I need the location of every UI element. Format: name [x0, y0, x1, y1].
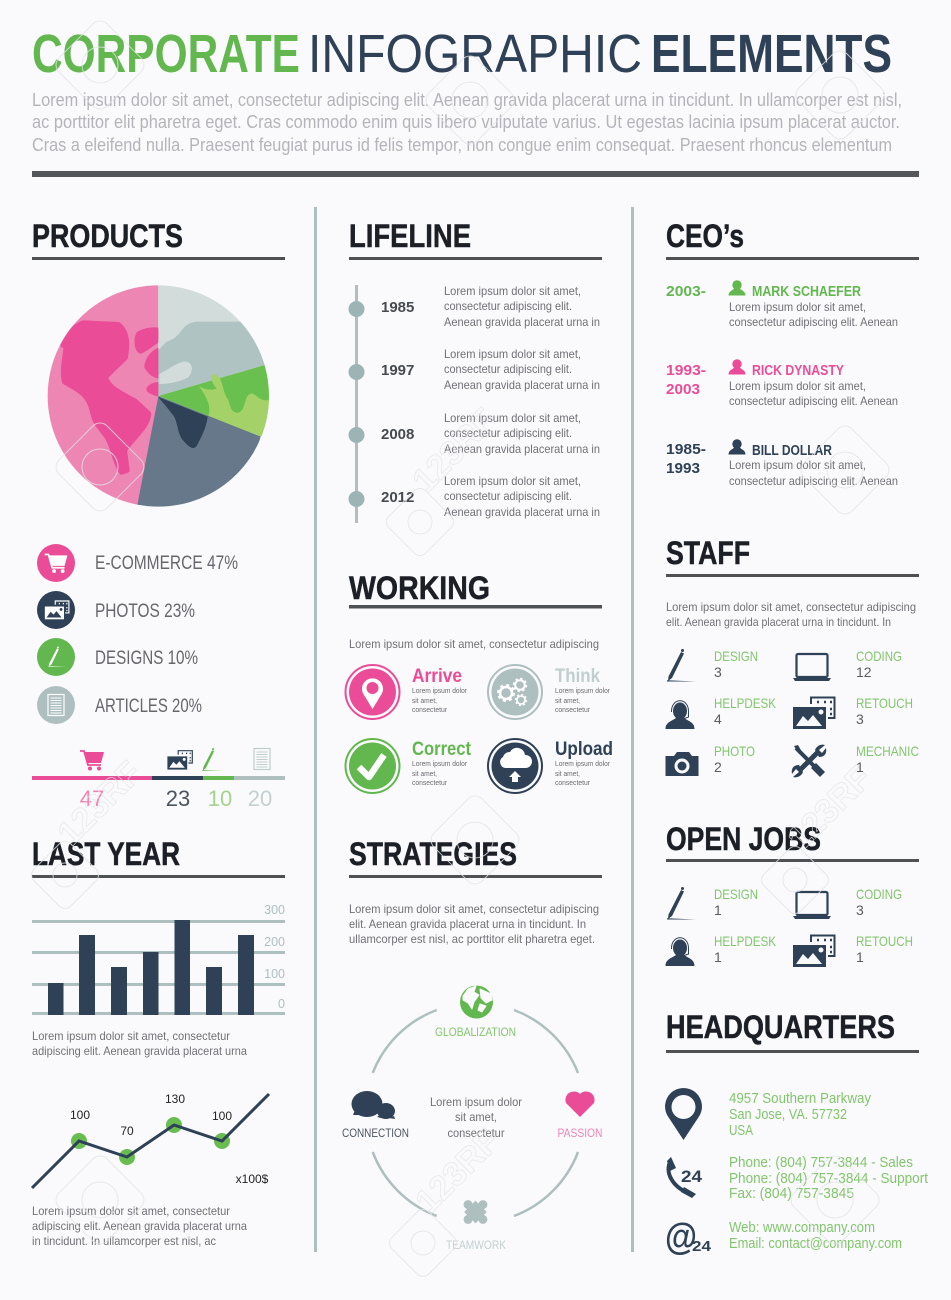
job: design: DESIGN	[714, 886, 758, 902]
entry 2008: 2008	[381, 426, 414, 443]
job: design	[667, 886, 758, 920]
bar chart: 300	[264, 903, 285, 917]
title	[32, 24, 892, 84]
job: helpdesk: 1	[714, 949, 722, 965]
ceo: rick dynasty: RICK DYNASTY	[752, 363, 844, 379]
entry 1997: consectetur adipiscing elit.	[444, 362, 572, 376]
ceo: rick dynasty	[666, 359, 898, 408]
share bar: 20	[248, 786, 272, 811]
step: arrive: Lorem ipsum dolor	[412, 686, 467, 695]
address: San Jose, VA. 57732	[729, 1107, 847, 1123]
address	[665, 1088, 872, 1140]
phone: 24	[681, 1167, 703, 1186]
ceo: rick dynasty: Lorem ipsum dolor sit amet,	[729, 379, 866, 393]
phone: Fax: (804) 757-3845	[729, 1186, 854, 1202]
entry 2008	[381, 411, 600, 456]
job: retouch	[793, 933, 913, 967]
web and email: @	[665, 1216, 697, 1257]
staff: helpdesk	[666, 695, 777, 729]
cycle centre text: sit amet,	[455, 1110, 497, 1124]
step: think: sit amet,	[555, 696, 580, 705]
step: arrive: sit amet,	[412, 696, 437, 705]
panel: last year	[32, 836, 285, 1248]
entry 1997: Aenean gravida placerat urna in	[444, 378, 600, 392]
ceo: bill dollar: BILL DOLLAR	[752, 443, 832, 459]
icon: connection	[342, 1091, 409, 1140]
staff: helpdesk: HELPDESK	[714, 695, 777, 711]
entry 2012	[381, 474, 600, 519]
heading: lifeline: LIFELINE	[349, 218, 471, 254]
entry 1997	[381, 347, 600, 392]
strategies text	[349, 902, 599, 946]
staff: coding	[793, 648, 902, 681]
step: arrive	[346, 665, 467, 719]
heading: lifeline	[349, 218, 602, 260]
ceo: bill dollar: Lorem ipsum dolor sit amet,	[729, 458, 866, 472]
legend: photos: PHOTOS 23%	[95, 601, 195, 622]
ceo: mark schaefer: 2003-	[666, 284, 706, 300]
job: helpdesk	[666, 933, 777, 966]
line chart	[32, 1092, 269, 1188]
header rule	[32, 171, 919, 177]
staff: design	[667, 648, 758, 682]
entry 2012: 2012	[381, 489, 414, 506]
legend: articles	[37, 686, 202, 724]
ceo: bill dollar: consectetur adipiscing elit. Aenean	[729, 474, 898, 488]
web and email: Email: contact@company.com	[729, 1236, 902, 1252]
ceo: bill dollar: 1985-	[666, 442, 706, 458]
step: think	[488, 665, 610, 719]
bar chart caption	[32, 1029, 247, 1058]
line chart caption: adipiscing elit. Aenean gravida placerat urna	[32, 1219, 247, 1233]
heading: working: WORKING	[349, 570, 490, 606]
staff: photo: PHOTO	[714, 743, 755, 759]
step: correct: consectetur	[412, 778, 447, 787]
panel: staff	[666, 535, 919, 777]
staff: coding: CODING	[856, 648, 902, 664]
panel: open jobs	[666, 821, 919, 967]
ceo: rick dynasty: 1993-	[666, 363, 706, 379]
line chart caption: in tincidunt. In ullamcorper est nisl, ac	[32, 1234, 216, 1248]
ceo: mark schaefer: consectetur adipiscing elit. Aenean	[729, 315, 898, 329]
staff text	[666, 600, 916, 629]
job: retouch: RETOUCH	[856, 933, 913, 949]
job: design: 1	[714, 902, 722, 918]
ceo: rick dynasty: consectetur adipiscing elit. Aenean	[729, 394, 898, 408]
cycle centre text	[430, 1095, 522, 1140]
cycle centre text: Lorem ipsum dolor	[430, 1095, 522, 1109]
title: CORPORATE	[32, 24, 300, 84]
icon: passion: PASSION	[558, 1128, 602, 1140]
step: upload: consectetur	[555, 778, 590, 787]
heading: ceos	[666, 218, 919, 260]
ceo: bill dollar	[666, 439, 898, 488]
legend: e-commerce	[37, 544, 238, 582]
legend	[37, 544, 238, 724]
heading: staff: STAFF	[666, 535, 750, 571]
entry 1985: Lorem ipsum dolor sit amet,	[444, 284, 581, 298]
intro text	[32, 90, 902, 155]
staff text: Lorem ipsum dolor sit amet, consectetur adipiscing	[666, 600, 916, 614]
title: INFOGRAPHIC	[308, 24, 642, 84]
staff: retouch: RETOUCH	[856, 695, 913, 711]
entry 2008: Aenean gravida placerat urna in	[444, 442, 600, 456]
staff: retouch	[793, 695, 913, 729]
timeline	[348, 284, 600, 523]
line chart caption: Lorem ipsum dolor sit amet, consectetur	[32, 1204, 230, 1218]
strategies text: Lorem ipsum dolor sit amet, consectetur adipiscing	[349, 902, 599, 916]
panel: headquarters	[665, 1009, 928, 1257]
phone	[667, 1155, 928, 1202]
staff text: elit. Aenean gravida placerat urna in tincidunt. In	[666, 615, 891, 629]
cycle centre text: consectetur	[448, 1126, 504, 1140]
entry 1985: 1985	[381, 299, 414, 316]
bar chart caption: Lorem ipsum dolor sit amet, consectetur	[32, 1029, 230, 1043]
strategies text: elit. Aenean gravida placerat urna in tincidunt. In	[349, 917, 586, 931]
heading: strategies: STRATEGIES	[349, 836, 517, 872]
heading: ceos: CEO’s	[666, 218, 744, 254]
working intro: Lorem ipsum dolor sit amet, consectetur adipiscing	[349, 637, 599, 651]
line chart: 100	[212, 1109, 232, 1123]
legend: articles: ARTICLES 20%	[95, 696, 202, 717]
icon: teamwork	[446, 1191, 506, 1252]
ceo: bill dollar: 1993	[666, 461, 700, 477]
heading: strategies	[349, 836, 602, 878]
heading: open jobs: OPEN JOBS	[666, 821, 821, 857]
panel: strategies	[342, 836, 602, 1252]
heading: last year	[32, 836, 285, 878]
job: coding: CODING	[856, 886, 902, 902]
share bar: 23	[166, 786, 190, 811]
step: think: Think	[555, 666, 600, 687]
step: correct	[346, 739, 472, 793]
staff: mechanic: 1	[856, 759, 864, 775]
line chart: 130	[165, 1092, 185, 1106]
heading: working	[349, 570, 602, 608]
ceo: mark schaefer	[666, 280, 898, 329]
panel: ceos	[666, 218, 919, 488]
staff: retouch: 3	[856, 711, 864, 727]
bar chart caption: adipiscing elit. Aenean gravida placerat urna	[32, 1044, 247, 1058]
line chart: 70	[120, 1124, 134, 1138]
icon: passion	[558, 1091, 602, 1140]
ceo: mark schaefer: MARK SCHAEFER	[752, 284, 861, 300]
entry 2012: Lorem ipsum dolor sit amet,	[444, 474, 581, 488]
job: helpdesk: HELPDESK	[714, 933, 777, 949]
legend: designs	[37, 638, 198, 676]
staff: coding: 12	[856, 664, 872, 680]
address: USA	[729, 1123, 753, 1139]
panel: lifeline	[348, 218, 602, 523]
heading: products	[32, 218, 285, 260]
line chart: 100	[70, 1108, 90, 1122]
step: upload: Upload	[555, 739, 613, 760]
staff: helpdesk: 4	[714, 711, 722, 727]
step: correct: Correct	[412, 739, 472, 760]
bar chart: 0	[278, 997, 285, 1011]
bar chart	[32, 903, 285, 1015]
strategies text: ullamcorper est nisl, ac porttitor elit pharetra eget.	[349, 932, 595, 946]
entry 1985	[381, 284, 600, 329]
phone: Phone: (804) 757-3844 - Sales	[729, 1155, 913, 1171]
web and email: 24	[692, 1238, 712, 1255]
job: retouch: 1	[856, 949, 864, 965]
strategy cycle arcs	[373, 1010, 578, 1216]
bar chart: 200	[264, 935, 285, 949]
staff: design: 3	[714, 664, 722, 680]
title: ELEMENTS	[651, 24, 892, 84]
legend: e-commerce: E-COMMERCE 47%	[95, 553, 238, 574]
entry 1997: 1997	[381, 362, 414, 379]
address: 4957 Southern Parkway	[729, 1091, 872, 1107]
panel: working	[346, 570, 613, 793]
step: correct: Lorem ipsum dolor	[412, 759, 467, 768]
step: arrive: consectetur	[412, 705, 447, 714]
staff: design: DESIGN	[714, 648, 758, 664]
entry 2008: Lorem ipsum dolor sit amet,	[444, 411, 581, 425]
step: upload	[488, 739, 613, 793]
job: coding	[793, 886, 902, 919]
web and email: Web: www.company.com	[729, 1220, 875, 1236]
step: correct: sit amet,	[412, 769, 437, 778]
staff: photo	[666, 743, 755, 776]
line chart: x100$	[236, 1172, 269, 1186]
panel: products	[17, 218, 287, 811]
ceo: mark schaefer: Lorem ipsum dolor sit amet,	[729, 300, 866, 314]
share bar: 47	[80, 786, 104, 811]
pie chart	[48, 285, 269, 507]
entry 2012: consectetur adipiscing elit.	[444, 489, 572, 503]
step: upload: Lorem ipsum dolor	[555, 759, 610, 768]
phone: Phone: (804) 757-3844 - Support	[729, 1171, 928, 1187]
icon: globalization: GLOBALIZATION	[435, 1027, 516, 1039]
staff: mechanic	[792, 743, 919, 777]
share bar	[32, 748, 285, 811]
icon: connection: CONNECTION	[342, 1128, 409, 1140]
step: arrive: Arrive	[412, 666, 462, 687]
heading: last year: LAST YEAR	[32, 836, 180, 872]
entry 2012: Aenean gravida placerat urna in	[444, 505, 600, 519]
legend: designs: DESIGNS 10%	[95, 648, 198, 669]
legend: photos	[37, 591, 195, 629]
job: coding: 3	[856, 902, 864, 918]
bar chart: 100	[264, 967, 285, 981]
entry 2008: consectetur adipiscing elit.	[444, 426, 572, 440]
entry 1997: Lorem ipsum dolor sit amet,	[444, 347, 581, 361]
step: think: consectetur	[555, 705, 590, 714]
share bar: 10	[208, 786, 232, 811]
heading: open jobs	[666, 821, 919, 862]
heading: products: PRODUCTS	[32, 218, 183, 254]
step: think: Lorem ipsum dolor	[555, 686, 610, 695]
staff: mechanic: MECHANIC	[856, 743, 919, 759]
line chart caption	[32, 1204, 247, 1248]
heading: staff	[666, 535, 919, 577]
icon: teamwork: TEAMWORK	[446, 1240, 506, 1252]
column dividers	[314, 207, 634, 1252]
heading: headquarters: HEADQUARTERS	[666, 1009, 895, 1045]
web and email	[665, 1216, 902, 1257]
ceo: rick dynasty: 2003	[666, 382, 700, 398]
entry 1985: Aenean gravida placerat urna in	[444, 315, 600, 329]
icon: globalization	[435, 986, 516, 1039]
entry 1985: consectetur adipiscing elit.	[444, 299, 572, 313]
step: upload: sit amet,	[555, 769, 580, 778]
staff: photo: 2	[714, 759, 722, 775]
